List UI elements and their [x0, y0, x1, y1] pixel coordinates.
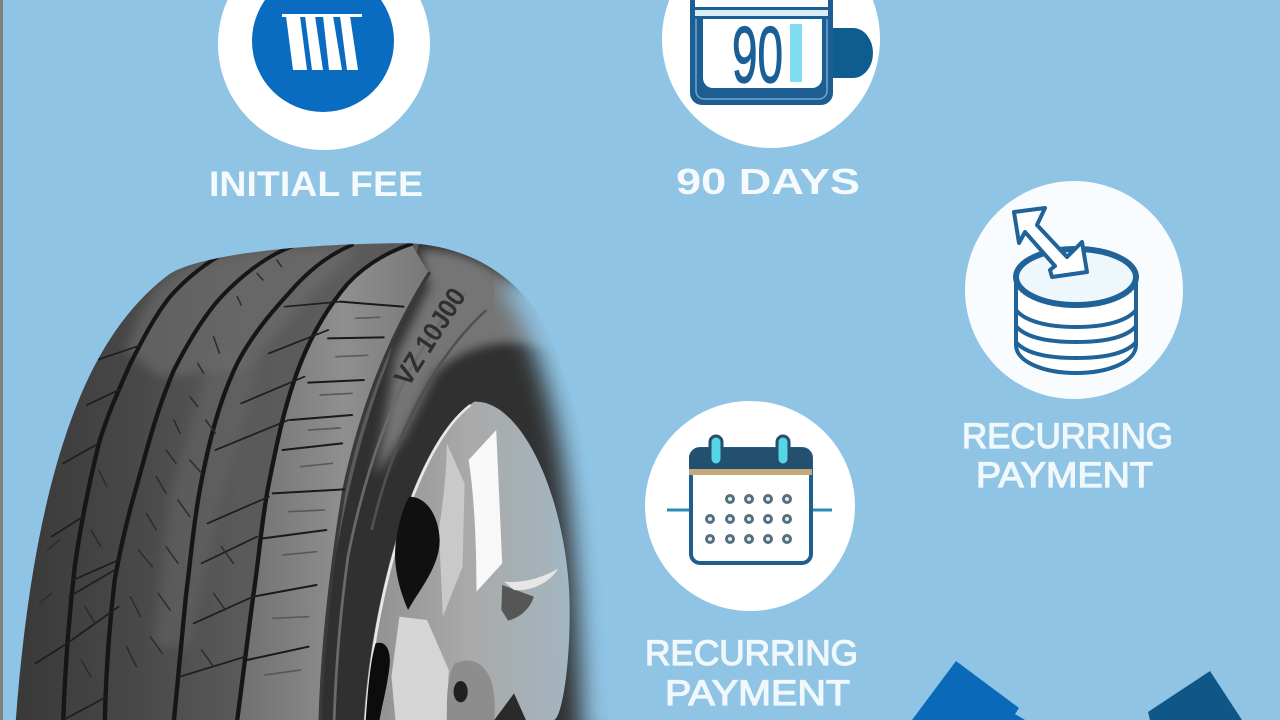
icon: 90 day battery calendar: 90 — [732, 10, 783, 99]
rib faint notches — [265, 317, 380, 675]
main tread grooves — [63, 244, 429, 720]
right wheel opening — [501, 585, 534, 621]
second spoke — [439, 443, 465, 617]
diagonal tread sipes — [36, 302, 340, 720]
icon: white disc — [662, 0, 880, 148]
item: recurring payment coins — [962, 181, 1183, 495]
sidewall bead lines — [334, 293, 486, 720]
sidewall lettering: VZ 10J00 — [386, 284, 473, 389]
sidewall — [322, 244, 589, 720]
label: recurring payment: RECURRING — [962, 417, 1173, 456]
center tread highlight — [157, 377, 228, 645]
label: initial fee: INITIAL FEE — [209, 165, 423, 204]
icon: white disc — [645, 401, 855, 611]
icon: white disc — [965, 181, 1183, 399]
wheel rim — [364, 402, 570, 720]
left edge strip — [0, 0, 3, 720]
shape: blue corner block — [912, 661, 1025, 720]
dark wheel opening — [395, 497, 440, 610]
icon: 90 day battery calendar — [690, 0, 873, 105]
hub — [447, 661, 495, 720]
item: recurring payment calendar — [645, 401, 858, 713]
icon: coin stack with arrow — [1014, 208, 1136, 373]
icon: blue disc with bars — [252, 0, 394, 112]
label: recurring payment: RECURRING — [645, 634, 858, 673]
bright spoke — [469, 430, 502, 592]
tread texture marks — [40, 260, 282, 677]
label: 90 days: 90 DAYS — [676, 161, 860, 202]
sidewall upper lighter band — [376, 250, 561, 477]
outer tread rib — [237, 244, 429, 720]
tire body — [16, 243, 609, 720]
shoulder highlight — [127, 249, 356, 377]
label: recurring payment — [962, 417, 1173, 495]
label: recurring payment: PAYMENT — [976, 456, 1153, 495]
icon: calendar — [667, 436, 832, 563]
lower right spoke — [494, 693, 526, 720]
shape: dark blue corner block — [1148, 671, 1242, 720]
item: 90 days — [662, 0, 880, 202]
right edge fade — [528, 273, 612, 720]
icon: white disc — [218, 0, 430, 150]
label: recurring payment: PAYMENT — [665, 674, 850, 713]
label: recurring payment — [645, 634, 858, 713]
spoke highlight — [504, 568, 558, 590]
hub bolt — [454, 681, 468, 702]
item: initial fee — [209, 0, 430, 204]
lower wheel opening — [366, 643, 390, 720]
rib sipes — [247, 302, 403, 660]
tire surface details — [36, 243, 617, 720]
lower spokes — [391, 617, 449, 720]
rim edge highlight — [366, 405, 471, 720]
tire and wheel photo illustration — [16, 243, 617, 720]
